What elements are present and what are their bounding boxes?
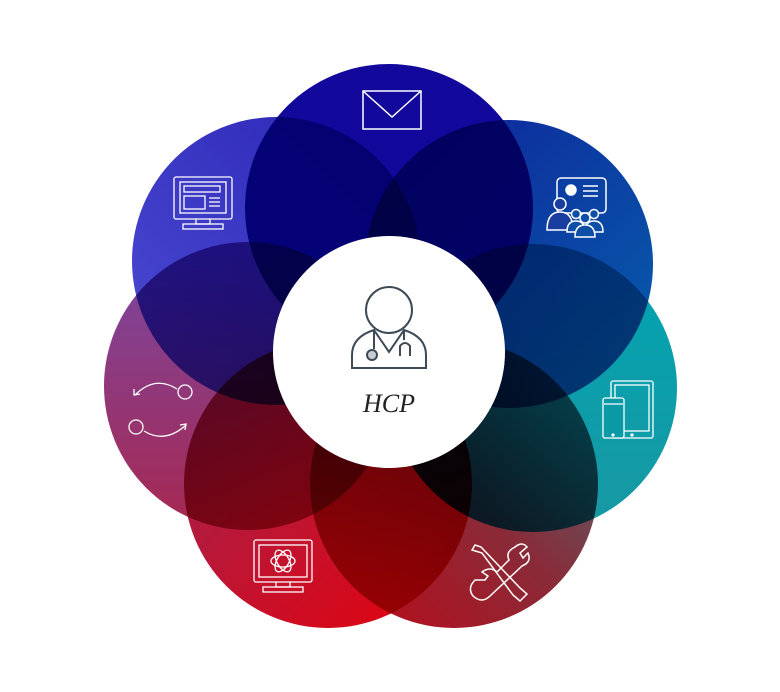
icon: tablet and phone [603, 381, 653, 438]
circle: left [104, 242, 392, 530]
circle: top left [132, 117, 420, 405]
circle: bottom left [184, 340, 472, 628]
icon: monitor atom [254, 540, 312, 592]
icon: envelope [363, 91, 421, 129]
icon: monitor web [174, 177, 232, 229]
icon: doctor [352, 287, 426, 368]
circle: bottom right [310, 340, 598, 628]
circle: right [389, 244, 677, 532]
icon: tools [470, 544, 529, 601]
circle: top right [365, 120, 653, 408]
icon: people presentation [547, 178, 606, 237]
center white circle [273, 236, 505, 468]
label: HCP: HCP [362, 389, 415, 418]
circle: top [245, 64, 533, 352]
icon: exchange arrows [129, 383, 192, 436]
